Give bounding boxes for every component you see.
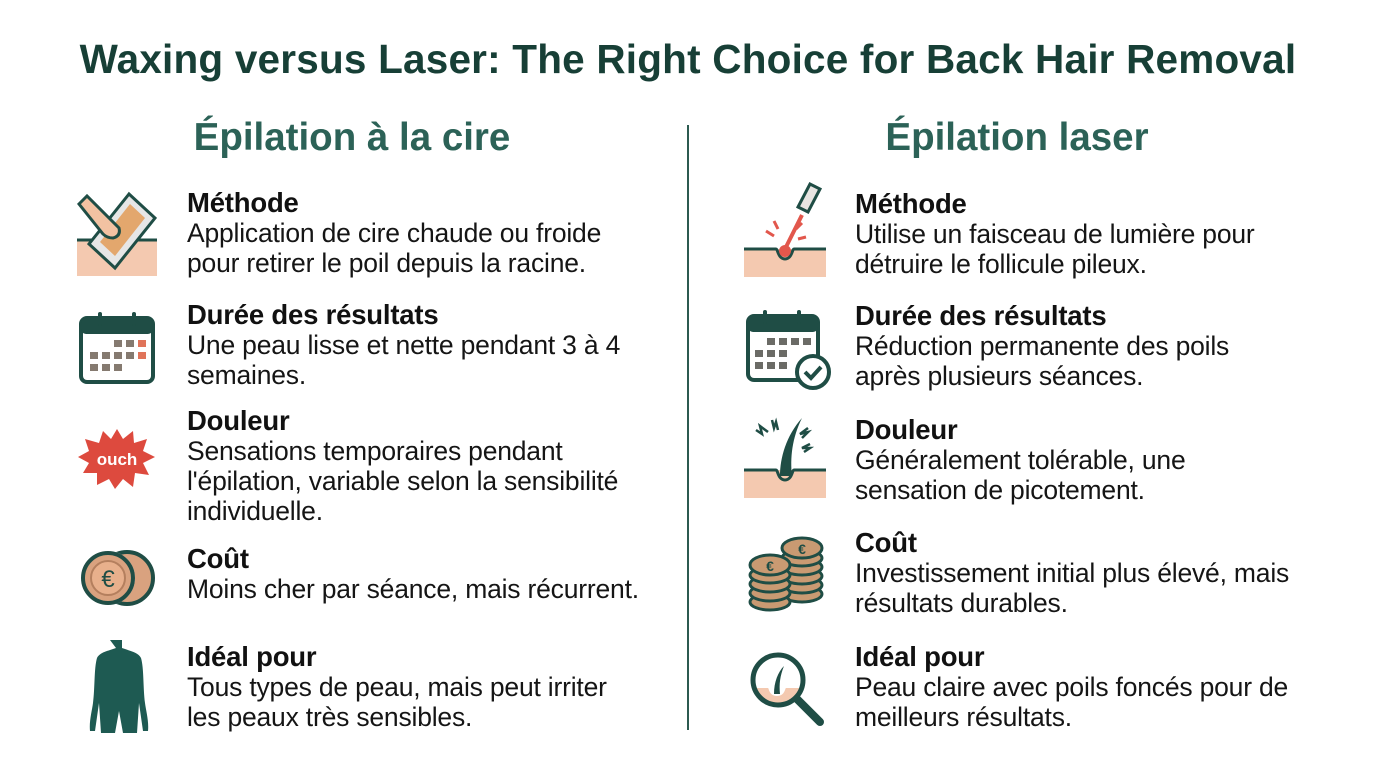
column heading: waxing: Épilation à la cire <box>194 116 510 159</box>
text <box>187 187 601 278</box>
text: Méthode <box>855 188 967 219</box>
icon: coin stacks <box>748 536 824 612</box>
icon: coins: € <box>101 566 115 593</box>
text: Investissement initial plus élevé, mais <box>855 558 1289 588</box>
text: Douleur <box>187 405 290 436</box>
text: individuelle. <box>187 496 323 526</box>
text: l'épilation, variable selon la sensibilité <box>187 466 618 496</box>
icon: body silhouette <box>90 640 148 733</box>
text <box>855 188 1255 279</box>
icon: wax strip <box>77 192 157 276</box>
icon: coin stacks: € <box>798 541 806 557</box>
text: après plusieurs séances. <box>855 361 1143 391</box>
text: résultats durables. <box>855 588 1068 618</box>
icon: hair with sparks <box>744 418 826 498</box>
text <box>187 405 618 526</box>
text: détruire le follicule pileux. <box>855 249 1147 279</box>
text <box>855 414 1185 505</box>
text: Moins cher par séance, mais récurrent. <box>187 574 639 604</box>
item: waxing ideal <box>90 640 607 733</box>
item: laser ideal <box>750 641 1288 732</box>
text: Idéal pour <box>187 641 316 672</box>
text: Durée des résultats <box>187 299 438 330</box>
icon: ouch burst <box>78 429 155 489</box>
text: Tous types de peau, mais peut irriter <box>187 672 607 702</box>
text: semaines. <box>187 360 306 390</box>
text: pour retirer le poil depuis la racine. <box>187 248 586 278</box>
icon: ouch burst: ouch <box>97 450 137 469</box>
item: laser method <box>744 182 1255 279</box>
item: laser pain <box>744 414 1185 505</box>
text: Durée des résultats <box>855 300 1106 331</box>
text: Utilise un faisceau de lumière pour <box>855 219 1255 249</box>
title: Waxing versus Laser: The Right Choice for Back Hair Removal <box>80 36 1296 82</box>
item: waxing cost <box>81 543 639 606</box>
icon: calendar with check <box>746 310 831 390</box>
text: Sensations temporaires pendant <box>187 436 563 466</box>
item: waxing method <box>77 187 601 278</box>
item: waxing duration <box>79 299 620 390</box>
text: meilleurs résultats. <box>855 702 1072 732</box>
column heading: laser: Épilation laser <box>885 116 1149 159</box>
item: laser cost <box>748 527 1289 618</box>
text <box>855 527 1289 618</box>
text <box>187 641 607 732</box>
text: Une peau lisse et nette pendant 3 à 4 <box>187 330 620 360</box>
text: sensation de picotement. <box>855 475 1145 505</box>
icon: coins <box>81 550 155 606</box>
text: Application de cire chaude ou froide <box>187 218 601 248</box>
text: les peaux très sensibles. <box>187 702 472 732</box>
text <box>187 299 620 390</box>
item: waxing pain <box>78 405 618 526</box>
text <box>855 641 1288 732</box>
text: Méthode <box>187 187 299 218</box>
icon: calendar <box>79 312 155 384</box>
text <box>855 300 1229 391</box>
text: Douleur <box>855 414 958 445</box>
text: Coût <box>187 543 249 574</box>
text: Réduction permanente des poils <box>855 331 1229 361</box>
text: Coût <box>855 527 917 558</box>
icon: coin stacks: € <box>766 558 774 574</box>
item: laser duration <box>746 300 1229 391</box>
text: Généralement tolérable, une <box>855 445 1185 475</box>
text <box>187 543 639 604</box>
icon: laser device <box>744 182 826 277</box>
text: Idéal pour <box>855 641 984 672</box>
text: Peau claire avec poils foncés pour de <box>855 672 1288 702</box>
icon: magnifier on hair <box>750 652 824 726</box>
